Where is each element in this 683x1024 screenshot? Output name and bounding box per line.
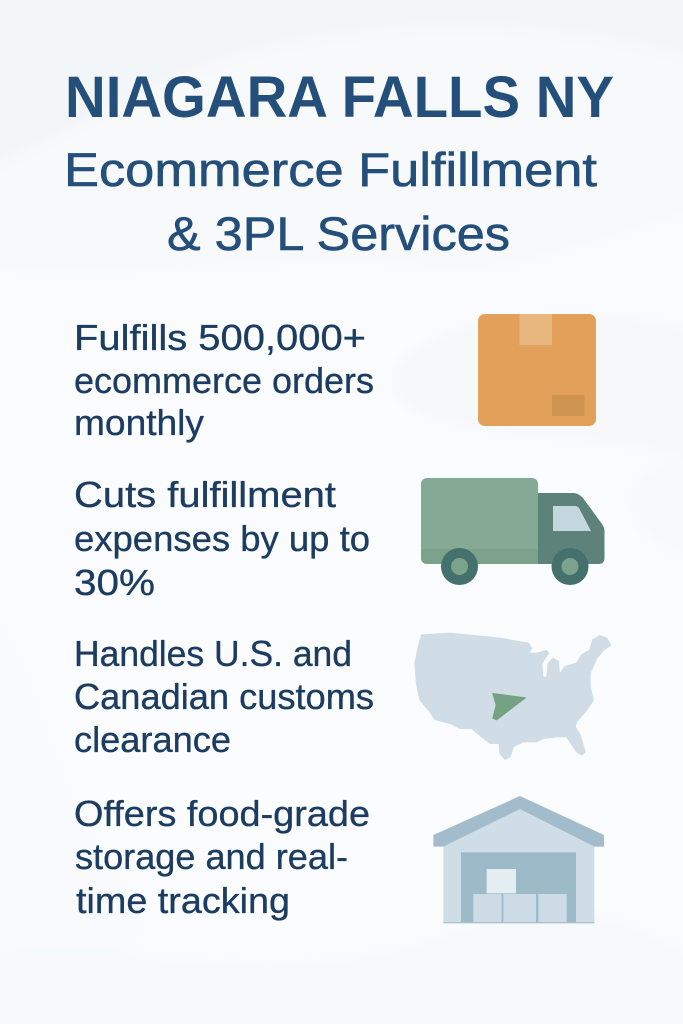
text: storage: time tracking [76,880,290,921]
text: expenses [74,474,370,603]
text: expenses: expenses by up to [74,518,370,559]
text: customs: Canadian customs [74,676,374,717]
title: NIAGARA FALLS NY [65,65,614,130]
text: orders: ecommerce orders [74,360,374,401]
icon: box [478,314,596,426]
subtitle: & 3PL Services [167,207,510,260]
text: storage [74,793,370,921]
text: expenses: 30% [74,562,155,603]
icon: truck [421,478,604,585]
icon: US map [415,633,611,759]
text: customs: Handles U.S. and [74,633,352,674]
icon: warehouse [433,796,604,923]
subtitle: Ecommerce Fulfillment [64,143,597,196]
text: orders: monthly [74,402,204,443]
text: storage: Offers food-grade [74,793,370,834]
text: customs [74,633,374,760]
subtitle [64,143,597,260]
text: expenses: Cuts fulfillment [74,474,336,515]
text: customs: clearance [74,719,231,760]
text: orders [74,317,374,443]
text: orders: Fulfills 500,000+ [74,317,366,358]
text: storage: storage and real- [75,836,348,877]
